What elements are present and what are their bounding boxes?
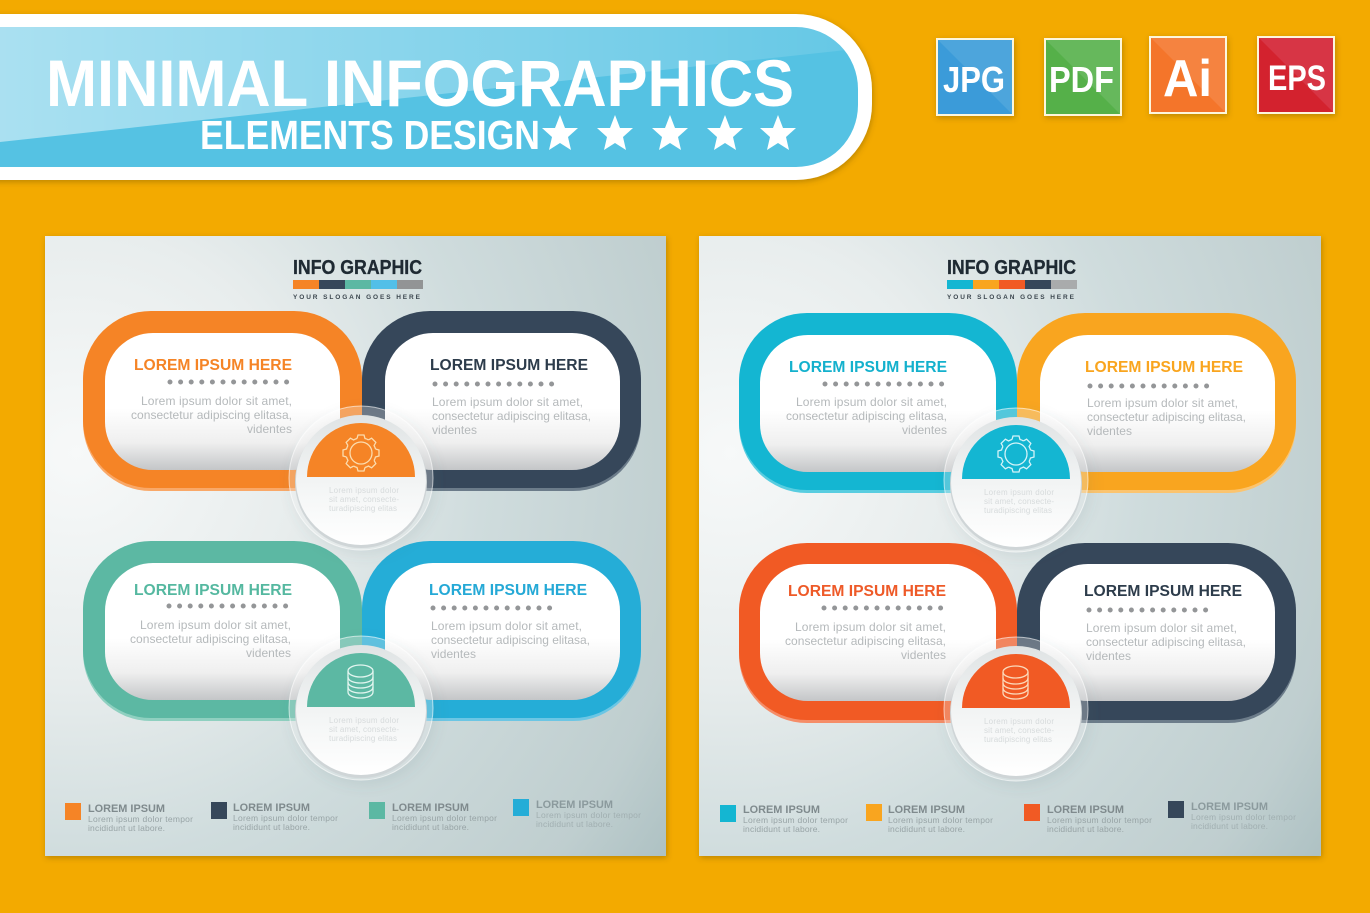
card: navy: videntes xyxy=(432,423,477,437)
icon: PDF badge xyxy=(1045,39,1121,115)
card: navy xyxy=(1017,543,1296,723)
banner subtitle: ELEMENTS DESIGN xyxy=(200,112,540,158)
card: cyan xyxy=(739,313,1017,493)
icon: PDF badge: PDF xyxy=(1049,59,1114,100)
card: navy xyxy=(362,311,641,491)
card: yellow: videntes xyxy=(1087,424,1132,438)
card: navy: LOREM IPSUM HERE xyxy=(430,357,588,374)
badge: database circle: sit amet, consecte- xyxy=(984,726,1054,735)
card: teal: LOREM IPSUM HERE xyxy=(134,582,292,599)
badge: gear circle: turadipiscing elitas xyxy=(984,506,1052,515)
legend: left panel: Lorem ipsum dolor tempor xyxy=(536,810,641,820)
legend: left panel: LOREM IPSUM xyxy=(233,802,310,814)
card: cyan: consectetur adipiscing elitasa, xyxy=(786,409,947,423)
card: orange: consectetur adipiscing elitasa, xyxy=(131,408,292,422)
legend: left panel: Lorem ipsum dolor tempor xyxy=(88,814,193,824)
card: yellow: consectetur adipiscing elitasa, xyxy=(1087,410,1246,424)
card: red: Lorem ipsum dolor sit amet, xyxy=(795,620,946,634)
card: cyan: videntes xyxy=(902,423,947,437)
legend: right panel: Lorem ipsum dolor tempor xyxy=(743,815,848,825)
card: teal xyxy=(83,541,362,721)
legend: left panel: incididunt ut labore. xyxy=(536,819,613,829)
legend: right panel: incididunt ut labore. xyxy=(1191,821,1268,831)
legend: right panel: Lorem ipsum dolor tempor xyxy=(888,815,993,825)
icon: database xyxy=(1003,666,1028,699)
icon: Ai badge: Ai xyxy=(1163,50,1212,108)
card: yellow xyxy=(1017,313,1296,493)
badge: gear circle xyxy=(944,408,1088,552)
badge: database circle: turadipiscing elitas xyxy=(329,734,397,743)
badge: gear circle: Lorem ipsum dolor xyxy=(984,488,1054,497)
legend: right panel: Lorem ipsum dolor tempor xyxy=(1191,812,1296,822)
legend: right panel: LOREM IPSUM xyxy=(1191,801,1268,813)
card: yellow: LOREM IPSUM HERE xyxy=(1085,359,1243,376)
legend: right panel: incididunt ut labore. xyxy=(888,824,965,834)
icon: database xyxy=(348,665,373,698)
legend: right panel: incididunt ut labore. xyxy=(743,824,820,834)
panel: right infographic xyxy=(699,236,1321,856)
heading: info graphic: YOUR SLOGAN GOES HERE xyxy=(947,294,1075,301)
card: red: consectetur adipiscing elitasa, xyxy=(785,634,946,648)
badge: gear circle: Lorem ipsum dolor xyxy=(329,486,399,495)
heading: info graphic: INFO GRAPHIC xyxy=(293,257,422,279)
card: orange: Lorem ipsum dolor sit amet, xyxy=(141,394,292,408)
header banner xyxy=(0,14,872,180)
legend: right panel: Lorem ipsum dolor tempor xyxy=(1047,815,1152,825)
card: blue: Lorem ipsum dolor sit amet, xyxy=(431,619,582,633)
card: navy: consectetur adipiscing elitasa, xyxy=(1086,635,1246,649)
card: teal: consectetur adipiscing elitasa, xyxy=(130,632,291,646)
badge: database circle: Lorem ipsum dolor xyxy=(329,716,399,725)
card: orange: videntes xyxy=(247,422,292,436)
icon: JPG badge: JPG xyxy=(943,59,1005,100)
card: cyan: LOREM IPSUM HERE xyxy=(789,359,947,376)
legend: left panel: Lorem ipsum dolor tempor xyxy=(392,813,497,823)
icon: EPS badge: EPS xyxy=(1268,59,1326,98)
heading: info graphic: YOUR SLOGAN GOES HERE xyxy=(293,294,421,301)
card: cyan: Lorem ipsum dolor sit amet, xyxy=(796,395,947,409)
card: blue xyxy=(362,541,641,721)
badge: database circle: turadipiscing elitas xyxy=(984,735,1052,744)
card: navy: Lorem ipsum dolor sit amet, xyxy=(1086,621,1237,635)
legend: left panel: incididunt ut labore. xyxy=(88,823,165,833)
legend: right panel: LOREM IPSUM xyxy=(888,804,965,816)
badge: gear circle: sit amet, consecte- xyxy=(329,495,399,504)
badge: gear circle xyxy=(289,406,433,550)
card: navy: videntes xyxy=(1086,649,1131,663)
legend: right panel xyxy=(720,801,1296,834)
legend: left panel: LOREM IPSUM xyxy=(536,799,613,811)
card: blue: consectetur adipiscing elitasa, xyxy=(431,633,590,647)
legend: left panel xyxy=(65,799,641,833)
card: blue: LOREM IPSUM HERE xyxy=(429,582,587,599)
icon: gear xyxy=(343,435,379,471)
card: red xyxy=(739,543,1017,723)
heading: info graphic: INFO GRAPHIC xyxy=(947,257,1076,279)
icon: Ai badge xyxy=(1150,37,1226,113)
icon: EPS badge xyxy=(1258,37,1334,113)
badge: database circle: Lorem ipsum dolor xyxy=(984,717,1054,726)
badge: database circle xyxy=(944,637,1088,781)
card: navy: Lorem ipsum dolor sit amet, xyxy=(432,395,583,409)
panel: left infographic xyxy=(45,236,666,856)
card: red: LOREM IPSUM HERE xyxy=(788,583,946,600)
card: teal: videntes xyxy=(246,646,291,660)
card: navy: LOREM IPSUM HERE xyxy=(1084,583,1242,600)
card: red: videntes xyxy=(901,648,946,662)
legend: right panel: LOREM IPSUM xyxy=(1047,804,1124,816)
badge: gear circle: sit amet, consecte- xyxy=(984,497,1054,506)
legend: left panel: Lorem ipsum dolor tempor xyxy=(233,813,338,823)
legend: left panel: incididunt ut labore. xyxy=(233,822,310,832)
badge: database circle xyxy=(289,636,433,780)
heading: info graphic xyxy=(947,257,1077,301)
icon: JPG badge xyxy=(937,39,1013,115)
card: blue: videntes xyxy=(431,647,476,661)
legend: right panel: incididunt ut labore. xyxy=(1047,824,1124,834)
card: yellow: Lorem ipsum dolor sit amet, xyxy=(1087,396,1238,410)
badge: gear circle: turadipiscing elitas xyxy=(329,504,397,513)
legend: left panel: incididunt ut labore. xyxy=(392,822,469,832)
legend: left panel: LOREM IPSUM xyxy=(392,802,469,814)
banner title: MINIMAL INFOGRAPHICS xyxy=(46,46,794,120)
card: orange xyxy=(83,311,362,491)
card: teal: Lorem ipsum dolor sit amet, xyxy=(140,618,291,632)
badge: database circle: sit amet, consecte- xyxy=(329,725,399,734)
card: orange: LOREM IPSUM HERE xyxy=(134,357,292,374)
legend: left panel: LOREM IPSUM xyxy=(88,803,165,815)
card: navy: consectetur adipiscing elitasa, xyxy=(432,409,591,423)
legend: right panel: LOREM IPSUM xyxy=(743,804,820,816)
heading: info graphic xyxy=(293,257,423,301)
rating stars xyxy=(542,115,796,150)
icon: gear xyxy=(998,436,1034,472)
